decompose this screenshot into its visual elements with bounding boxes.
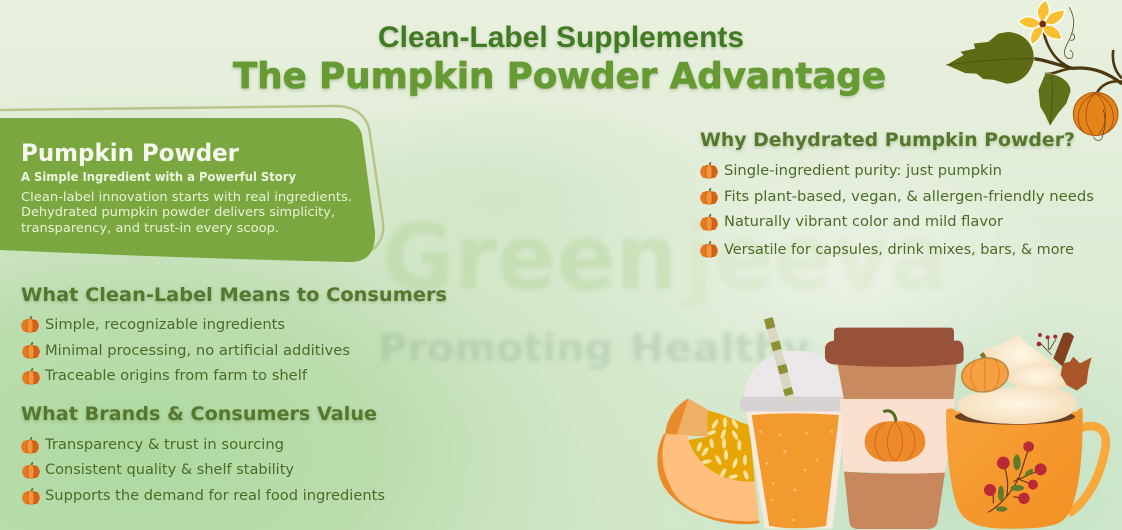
cup <box>746 410 846 529</box>
section: what brands and consumers value <box>21 403 385 505</box>
item 3: Naturally vibrant color and mild flavor <box>724 214 1003 230</box>
handle <box>1068 426 1106 513</box>
small leaf <box>1038 74 1071 126</box>
sleeve pumpkin <box>865 411 925 462</box>
heading: What Brands & Consumers Value <box>21 403 377 425</box>
panel body text: transparency, and trust-in every scoop. <box>21 220 279 235</box>
panel body text: Clean-label innovation starts with real ingredients. <box>21 189 352 204</box>
watermark: Greenjeeva logo text: Green <box>382 204 678 311</box>
vine <box>1034 59 1122 84</box>
item 2: Consistent quality & shelf stability <box>45 462 294 478</box>
panel heading: Pumpkin Powder <box>21 139 239 167</box>
title line 1: Clean-Label Supplements <box>378 21 744 54</box>
cup top <box>837 363 957 400</box>
item 1: Single-ingredient purity: just pumpkin <box>724 163 1002 179</box>
panel body text: Dehydrated pumpkin powder delivers simplicity, <box>21 204 335 219</box>
heading: Why Dehydrated Pumpkin Powder? <box>700 129 1075 151</box>
cup bottom <box>844 472 945 529</box>
item 2: Fits plant-based, vegan, & allergen-friendly needs <box>724 189 1094 205</box>
mug with whipped cream <box>946 333 1106 529</box>
flower <box>1018 0 1065 45</box>
heading: What Clean-Label Means to Consumers <box>21 284 447 306</box>
pumpkin wedge <box>657 398 759 524</box>
panel fill <box>0 118 375 262</box>
coffee cup <box>825 328 964 529</box>
item 4: Versatile for capsules, drink mixes, bars, & more <box>724 242 1074 258</box>
berry sprig on top <box>1037 333 1057 355</box>
illustration: pumpkin drinks group <box>657 318 1106 529</box>
hanging pumpkin <box>1073 92 1118 140</box>
mug body <box>946 408 1083 529</box>
panel outline <box>0 106 383 250</box>
illustration: vine with leaves, flower and pumpkin <box>946 0 1122 140</box>
big leaf <box>946 32 1034 84</box>
smoothie cup <box>740 318 851 529</box>
title line 2: The Pumpkin Powder Advantage <box>233 56 886 97</box>
watermark: Greenjeeva logo text: Promoting <box>378 326 613 370</box>
item 2: Minimal processing, no artificial additives <box>45 343 350 359</box>
title <box>233 21 886 97</box>
juice <box>752 413 839 528</box>
item 1: Transparency & trust in sourcing <box>44 437 284 453</box>
watermark: Greenjeeva logo text: jeeva <box>680 204 949 311</box>
section: why dehydrated pumpkin powder <box>700 129 1094 258</box>
autumn leaf <box>1061 357 1092 391</box>
panel subheading: A Simple Ingredient with a Powerful Story <box>21 170 296 184</box>
watermark: Greenjeeva logo text <box>378 204 949 370</box>
straw <box>768 318 792 403</box>
whipped cream <box>957 333 1077 424</box>
dome lid <box>744 351 847 398</box>
section: what clean-label means <box>21 284 447 385</box>
panel: pumpkin powder intro <box>0 106 383 262</box>
small pumpkin on cream <box>960 353 1010 395</box>
mug opening <box>955 409 1075 425</box>
cup lid <box>825 328 964 367</box>
berries on mug <box>984 441 1047 512</box>
lid rim <box>740 397 851 411</box>
item 3: Supports the demand for real food ingredients <box>45 488 385 504</box>
watermark: Greenjeeva logo text: Healthy <box>630 326 810 370</box>
panel body text <box>21 189 352 235</box>
item 3: Traceable origins from farm to shelf <box>44 368 308 384</box>
cinnamon stick <box>1053 333 1074 367</box>
item 1: Simple, recognizable ingredients <box>45 317 285 333</box>
sleeve <box>840 399 955 474</box>
